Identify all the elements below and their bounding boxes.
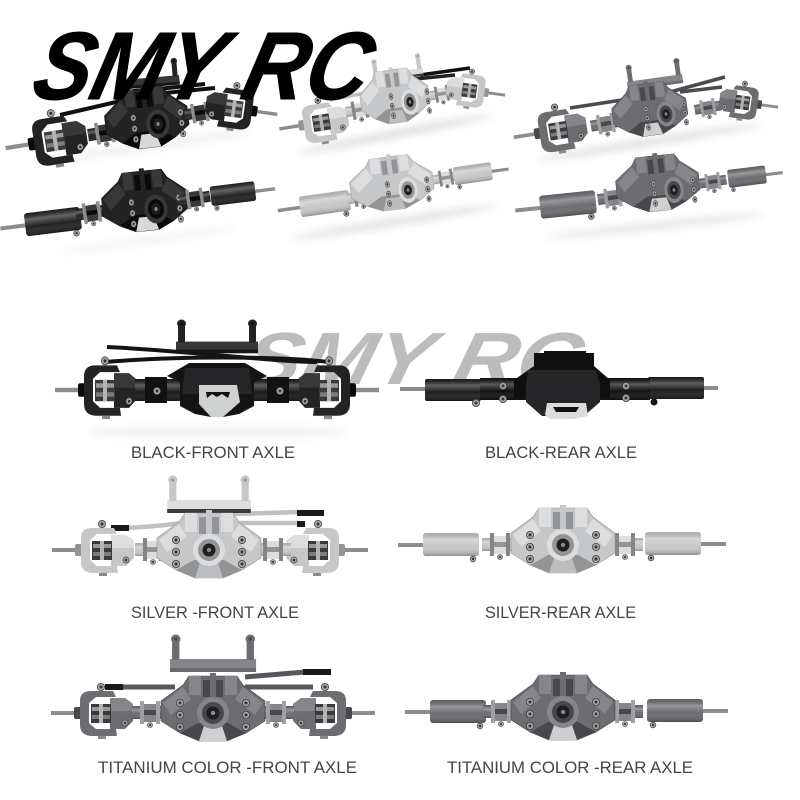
- upper steering rods: [60, 84, 215, 115]
- product: silver front axle, straight: [52, 476, 368, 578]
- product: black front axle, angled: [1, 58, 281, 175]
- axle tubes: [135, 379, 299, 401]
- product: silver rear axle, angled: [276, 149, 511, 242]
- product: black rear axle, straight: [400, 351, 718, 419]
- upper steering rods: [330, 68, 470, 100]
- label: titanium rear: TITANIUM COLOR -REAR AXLE: [447, 759, 693, 777]
- product: black rear axle, angled: [0, 164, 277, 255]
- skid plate: [199, 385, 240, 417]
- steering rods: [127, 512, 301, 528]
- product: titanium front axle, straight: [51, 634, 375, 741]
- watermark: SMY RC: SMY RC: [235, 317, 594, 400]
- label: black front: BLACK-FRONT AXLE: [131, 444, 295, 462]
- upper steering rods: [570, 77, 725, 108]
- label: silver rear: SILVER-REAR AXLE: [485, 604, 636, 622]
- shafts and tubes: [400, 387, 428, 391]
- product: titanium rear axle, angled: [514, 149, 784, 241]
- logo: SMY RC: SMY RC: [24, 12, 386, 120]
- product: titanium front axle, angled: [510, 58, 781, 164]
- product: titanium rear axle, straight: [405, 672, 728, 740]
- label: black rear: BLACK-REAR AXLE: [485, 444, 637, 462]
- label: silver front: SILVER -FRONT AXLE: [131, 604, 299, 622]
- label: titanium front: TITANIUM COLOR -FRONT AXLE: [98, 759, 357, 777]
- product: silver rear axle, straight: [398, 505, 726, 573]
- skid plate: [545, 403, 588, 419]
- steering rods: [118, 672, 313, 687]
- housing: [514, 353, 610, 398]
- housing: [167, 363, 267, 417]
- product: black front axle, straight: [55, 320, 379, 439]
- steering rods: [105, 347, 329, 362]
- product: silver front axle, angled: [275, 53, 508, 157]
